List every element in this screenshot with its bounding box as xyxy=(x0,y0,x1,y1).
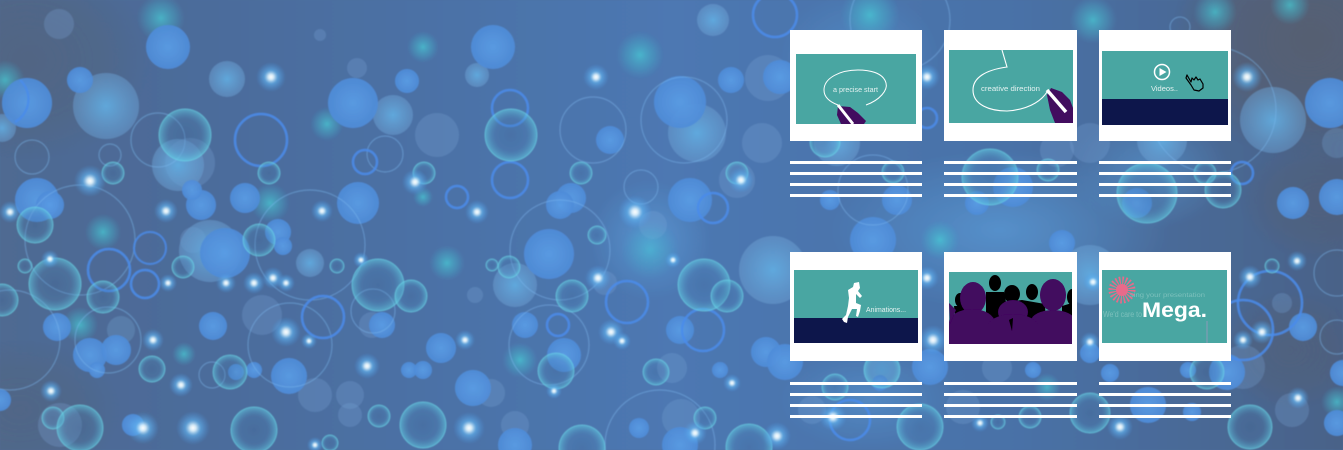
thumbnail 1: a precise start xyxy=(790,30,922,141)
thumbnail 6: Mega: We'd care to xyxy=(1103,310,1142,319)
thumbnail 4 text lines xyxy=(790,382,922,418)
thumbnail 1: a precise start: a precise start xyxy=(833,85,879,94)
icon: running figure xyxy=(842,282,862,323)
thumbnail 5: audience silhouette xyxy=(944,252,1077,361)
bubbles xyxy=(0,109,1279,450)
thumbnail 6: Mega xyxy=(1099,252,1231,361)
thumbnail 3: videos xyxy=(1099,30,1231,141)
icon: play button xyxy=(1154,64,1170,80)
thumbnail 2 text lines xyxy=(944,161,1077,197)
thumbnail 6 text lines xyxy=(1099,382,1231,418)
thumbnail 5 text lines xyxy=(944,382,1077,418)
thumbnail 3 text lines xyxy=(1099,161,1231,197)
thumbnail 2: creative direction: creative direction xyxy=(981,84,1040,93)
thumbnail 6: Mega: Mega. xyxy=(1142,299,1207,322)
thumbnail 4: animations: Animations... xyxy=(866,305,906,314)
thumbnail 4: animations xyxy=(790,252,922,361)
icon: hand cursor xyxy=(1186,75,1203,91)
thumbnail 6: Mega: sing your presentation xyxy=(1130,292,1205,299)
thumbnail 1 text lines xyxy=(790,161,922,197)
icon: pink burst xyxy=(1115,283,1129,297)
thumbnail 2: creative direction xyxy=(944,30,1077,141)
thumbnail 3: videos: Videos.. xyxy=(1151,84,1178,93)
